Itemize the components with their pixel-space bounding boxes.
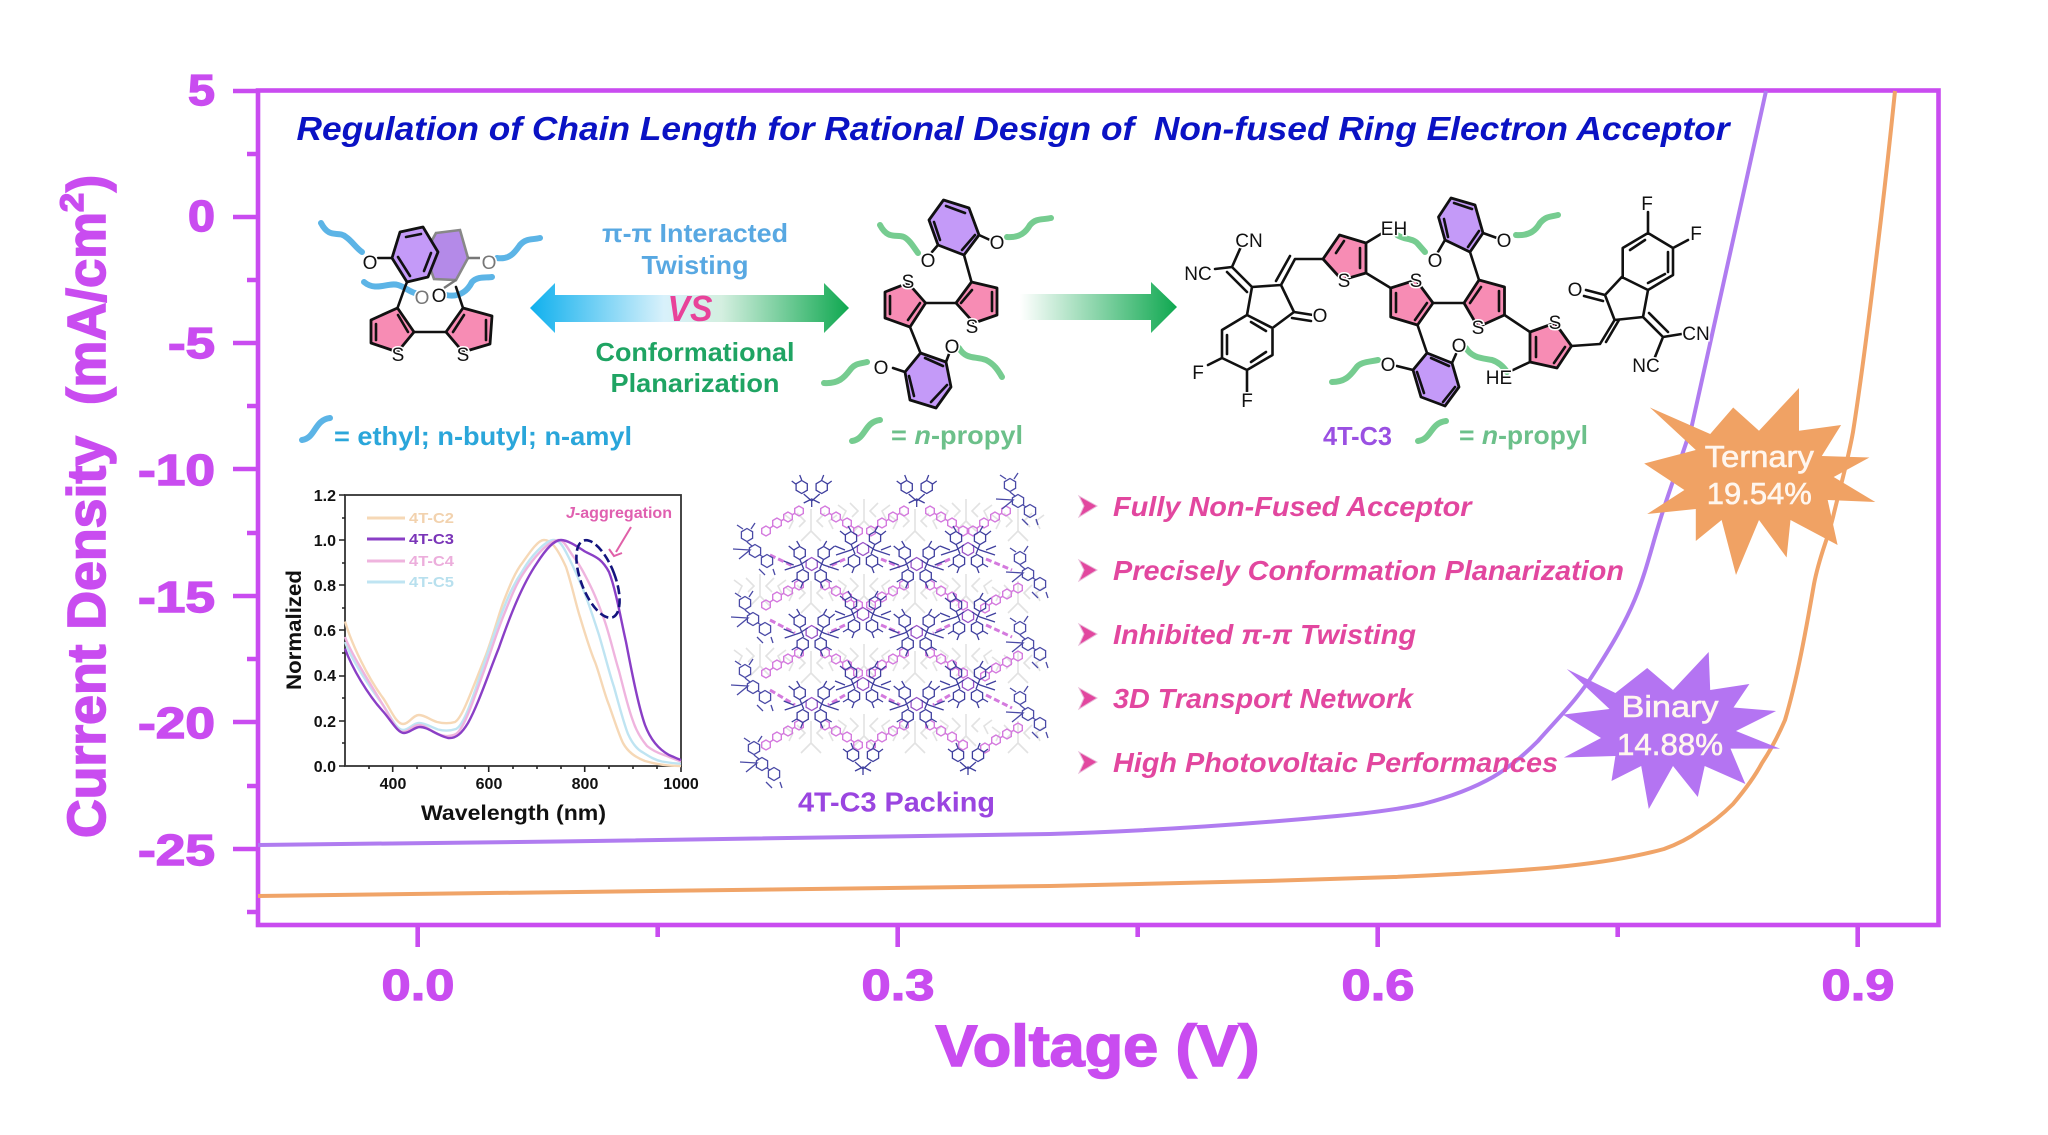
x axis numbers: 0.0 <box>382 961 454 1010</box>
y axis numbers: -25 <box>138 826 215 875</box>
molecule: 4T-C3 acceptor: O <box>1497 231 1511 252</box>
molecule: 4T-C3 acceptor: O <box>1568 280 1582 301</box>
molecule: 4T-C3 acceptor: S <box>1472 318 1484 339</box>
label: pi-pi interacted twisting <box>602 218 788 280</box>
inset y tick labels <box>314 488 336 776</box>
inset y tick labels: 1.2 <box>314 488 336 505</box>
starburst: ternary efficiency <box>1644 388 1875 575</box>
inset chart: normalized absorption <box>283 488 699 825</box>
molecule: twisted dimer with blue side chains: O <box>482 253 496 274</box>
molecule: 4T-C3 acceptor: CN <box>1235 231 1263 252</box>
y axis title: ) <box>57 175 117 192</box>
y axis title: (mA/cm <box>57 212 117 405</box>
molecule: 4T-C3 acceptor: F <box>1192 363 1204 384</box>
y axis title: 2 <box>54 193 90 212</box>
molecule: planar dimer with green side chains <box>824 200 1051 408</box>
inset y tick labels: 0.6 <box>314 623 336 640</box>
starburst: ternary efficiency: Ternary <box>1705 439 1814 474</box>
legend: green side chain definition: = n-propyl <box>891 420 1023 450</box>
label: conformational planarization: Conformational <box>596 337 794 367</box>
x axis ticks <box>418 925 1858 947</box>
molecule: 4T-C3 acceptor: NC <box>1632 356 1660 377</box>
y axis title: Current Density <box>57 436 117 838</box>
inset legend: 4T-C2 <box>409 510 454 527</box>
y axis ticks <box>233 91 258 912</box>
inset y axis title: Normalized <box>283 570 306 690</box>
arrow: green gradient to acceptor <box>1020 282 1177 333</box>
molecule: twisted dimer with blue side chains: O <box>415 288 429 309</box>
bullet 3: Inhibited π-π Twisting <box>1113 619 1416 650</box>
molecule: 4T-C3 acceptor: O <box>1428 251 1442 272</box>
y axis numbers: -15 <box>138 573 215 622</box>
molecule: 4T-C3 acceptor <box>1184 194 1710 412</box>
molecule: 4T-C3 acceptor: S <box>1549 313 1561 334</box>
crystal packing network <box>731 473 1048 788</box>
y axis numbers: 0 <box>188 192 215 241</box>
molecule: 4T-C3 acceptor: NC <box>1184 264 1212 285</box>
molecule: twisted dimer with blue side chains: O <box>432 286 446 307</box>
legend: blue side chain definition: = ethyl; n-butyl; n-amyl <box>334 421 632 451</box>
molecule: twisted dimer with blue side chains <box>321 223 540 366</box>
label: 4T-C3 with n-propyl: 4T-C3 <box>1323 421 1392 451</box>
molecule: 4T-C3 acceptor: CN <box>1682 324 1710 345</box>
title: Regulation of Chain Length for Rational Design of Non-fused Ring Electron Acceptor <box>296 110 1732 147</box>
chart frame: J-V plot area <box>258 90 1938 925</box>
y axis numbers: -5 <box>168 319 215 368</box>
inset legend: 4T-C5 <box>409 574 454 591</box>
molecule: 4T-C3 acceptor: HE <box>1486 368 1512 389</box>
bullet 1: Fully Non-Fused Acceptor <box>1113 491 1474 522</box>
molecule: planar dimer with green side chains: O <box>945 337 959 358</box>
x axis numbers: 0.6 <box>1342 961 1414 1010</box>
inset legend <box>367 510 455 591</box>
inset y tick labels: 0.2 <box>314 714 336 731</box>
inset legend: 4T-C4 <box>409 553 455 570</box>
label: conformational planarization: Planarization <box>610 368 780 398</box>
y axis title <box>54 175 117 838</box>
arrow: double-headed gradient <box>530 283 849 333</box>
molecule: twisted dimer with blue side chains: S <box>392 345 404 366</box>
starburst: binary efficiency: Binary <box>1622 689 1719 724</box>
inset legend: 4T-C3 <box>409 531 454 548</box>
curve: 4T-C2 <box>345 540 681 766</box>
curve: 4T-C5 <box>345 540 681 764</box>
starburst: binary efficiency: 14.88% <box>1617 727 1723 762</box>
curve: 4T-C4 <box>345 540 681 762</box>
molecule: 4T-C3 acceptor: O <box>1452 336 1466 357</box>
molecule: planar dimer with green side chains: O <box>921 251 935 272</box>
starburst: ternary efficiency: 19.54% <box>1707 476 1812 511</box>
molecule: planar dimer with green side chains: S <box>902 272 914 293</box>
label: pi-pi interacted twisting: Twisting <box>642 250 748 280</box>
molecule: twisted dimer with blue side chains: O <box>363 253 377 274</box>
bullet 2: Precisely Conformation Planarization <box>1113 555 1624 586</box>
molecule: planar dimer with green side chains: S <box>966 317 978 338</box>
starburst: binary efficiency <box>1563 652 1780 809</box>
J-aggregation annotation: J-aggregation <box>566 505 672 522</box>
molecule: 4T-C3 acceptor: S <box>1338 271 1350 292</box>
molecule: 4T-C3 acceptor: O <box>1313 306 1327 327</box>
feature bullet list <box>1079 491 1624 778</box>
inset axes box <box>345 495 681 766</box>
inset y tick labels: 0.4 <box>314 668 336 685</box>
molecule: twisted dimer with blue side chains: S <box>457 345 469 366</box>
y axis numbers: -10 <box>138 446 215 495</box>
y axis numbers <box>138 66 215 875</box>
x axis numbers <box>382 961 1894 1010</box>
molecule: 4T-C3 acceptor: F <box>1241 391 1253 412</box>
molecule: planar dimer with green side chains: O <box>990 233 1004 254</box>
label: pi-pi interacted twisting: π-π Interacted <box>602 218 788 248</box>
y axis numbers: 5 <box>188 66 215 115</box>
label: packing: 4T-C3 Packing <box>798 786 995 818</box>
label: 4T-C3 with n-propyl: = n-propyl <box>1459 420 1588 450</box>
molecule: 4T-C3 acceptor: S <box>1410 271 1422 292</box>
arrow: J-aggregation pointer <box>609 527 631 556</box>
inset y tick labels: 0.8 <box>314 578 336 595</box>
inset y tick labels: 1.0 <box>314 533 336 550</box>
molecule: 4T-C3 acceptor: F <box>1690 224 1702 245</box>
inset x tick labels: 800 <box>572 776 598 793</box>
inset ticks <box>339 495 681 772</box>
inset x tick labels <box>380 776 699 793</box>
molecule: planar dimer with green side chains: O <box>874 358 888 379</box>
inset x tick labels: 1000 <box>663 776 699 793</box>
y axis numbers: -20 <box>138 699 215 748</box>
bullet 4: 3D Transport Network <box>1113 683 1414 714</box>
inset y tick labels: 0.0 <box>314 759 336 776</box>
x axis numbers: 0.9 <box>1822 961 1894 1010</box>
x axis title: Voltage (V) <box>936 1014 1260 1079</box>
bullet 5: High Photovoltaic Performances <box>1113 747 1558 778</box>
curve: binary J-V <box>258 91 1766 845</box>
dashed ellipse <box>567 535 629 623</box>
label: VS: VS <box>668 288 712 329</box>
molecule: 4T-C3 acceptor: O <box>1381 355 1395 376</box>
inset x tick labels: 400 <box>380 776 406 793</box>
molecule: 4T-C3 acceptor: EH <box>1381 219 1407 240</box>
x axis numbers: 0.3 <box>862 961 934 1010</box>
inset x tick labels: 600 <box>476 776 502 793</box>
inset x axis title: Wavelength (nm) <box>421 802 606 825</box>
curve: ternary J-V <box>258 91 1895 896</box>
molecule: 4T-C3 acceptor: F <box>1641 194 1653 215</box>
label: 4T-C3 with n-propyl <box>1323 420 1588 451</box>
label: conformational planarization <box>596 337 794 398</box>
curve: 4T-C3 <box>345 540 681 760</box>
